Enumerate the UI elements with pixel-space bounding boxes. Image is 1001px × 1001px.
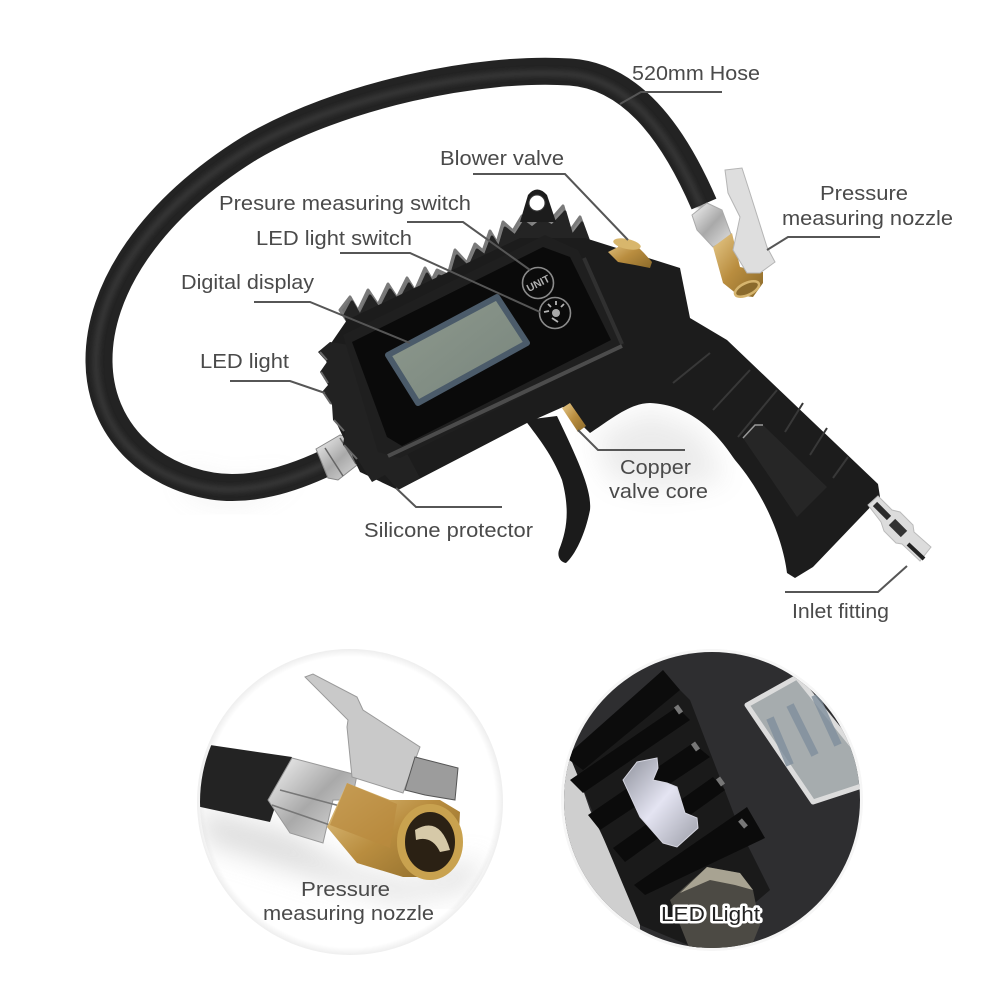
label: LED light: LED light	[200, 351, 289, 373]
face bevel highlight	[388, 346, 622, 456]
top silicone ribs	[345, 212, 592, 350]
inset display	[744, 676, 860, 804]
label: Digital display: Digital display	[181, 272, 314, 294]
digital display	[388, 297, 527, 403]
label: Pressure measuring nozzle: Pressure	[820, 183, 908, 205]
label: Presure measuring switch: Presure measuring switch	[219, 193, 471, 215]
label: Copper valve core: valve core	[609, 481, 708, 503]
inset label: Pressure	[301, 879, 390, 901]
grip pad	[743, 425, 827, 517]
hose	[96, 71, 704, 490]
gun body	[318, 190, 880, 578]
inset ribs	[570, 707, 765, 895]
nozzle silver ferrule	[692, 203, 732, 247]
inset top bar	[565, 670, 680, 770]
nozzle lever	[725, 168, 775, 273]
nozzle brass body	[713, 233, 763, 297]
icon: LED switch	[540, 298, 570, 328]
copper valve core	[562, 403, 586, 432]
side silicone ribs	[318, 342, 420, 490]
hang loop	[520, 190, 556, 222]
label: Blower valve: Blower valve	[440, 148, 564, 170]
label: 520mm Hose: 520mm Hose	[632, 63, 760, 85]
soft shadow	[200, 810, 480, 900]
hose ferrule at gun	[316, 435, 366, 480]
icon: UNIT switch	[522, 268, 554, 298]
handle and housing	[325, 238, 880, 578]
inset silver ferrule	[268, 758, 357, 843]
label: Copper valve core: Copper	[620, 457, 691, 479]
label: Inlet fitting: Inlet fitting	[792, 601, 889, 623]
inset rib block	[570, 673, 770, 950]
inset nut	[670, 867, 760, 950]
inset display digits	[766, 694, 842, 766]
inset hose	[196, 745, 292, 822]
label: LED light switch: LED light switch	[256, 228, 412, 250]
floor shadow under gun	[180, 410, 725, 505]
inset lever	[305, 674, 420, 793]
inlet fitting	[868, 496, 931, 561]
top silicone rib highlights	[340, 206, 590, 340]
inset brass body	[327, 783, 460, 877]
inset background	[560, 650, 865, 955]
black face panel	[352, 247, 611, 446]
panel: nozzle detail circle	[196, 649, 503, 955]
label: Pressure measuring nozzle	[782, 183, 953, 230]
face bevel	[343, 235, 625, 458]
trigger	[525, 416, 590, 563]
label: Copper valve core	[609, 457, 708, 503]
leader lines	[230, 92, 907, 592]
inset clip	[405, 757, 458, 800]
grip pad highlight	[743, 425, 763, 438]
icon: UNIT switch: UNIT	[525, 273, 553, 295]
blower valve	[608, 236, 652, 268]
inset nozzle opening	[401, 808, 459, 876]
inset label: LED Light	[661, 904, 760, 926]
inset LED lens	[623, 758, 698, 847]
grip ridges	[673, 353, 848, 478]
side rib highlights	[320, 352, 357, 459]
panel: LED light detail circle	[555, 649, 880, 960]
inset label: measuring nozzle	[263, 903, 434, 925]
label: Silicone protector: Silicone protector	[364, 520, 533, 542]
inset label	[263, 879, 434, 925]
face bevel side	[584, 258, 622, 344]
label: Pressure measuring nozzle: measuring nozzle	[782, 208, 953, 230]
inset lower-left background	[564, 759, 640, 929]
inset rib ends	[676, 706, 746, 827]
nozzle on hose end	[692, 168, 775, 300]
